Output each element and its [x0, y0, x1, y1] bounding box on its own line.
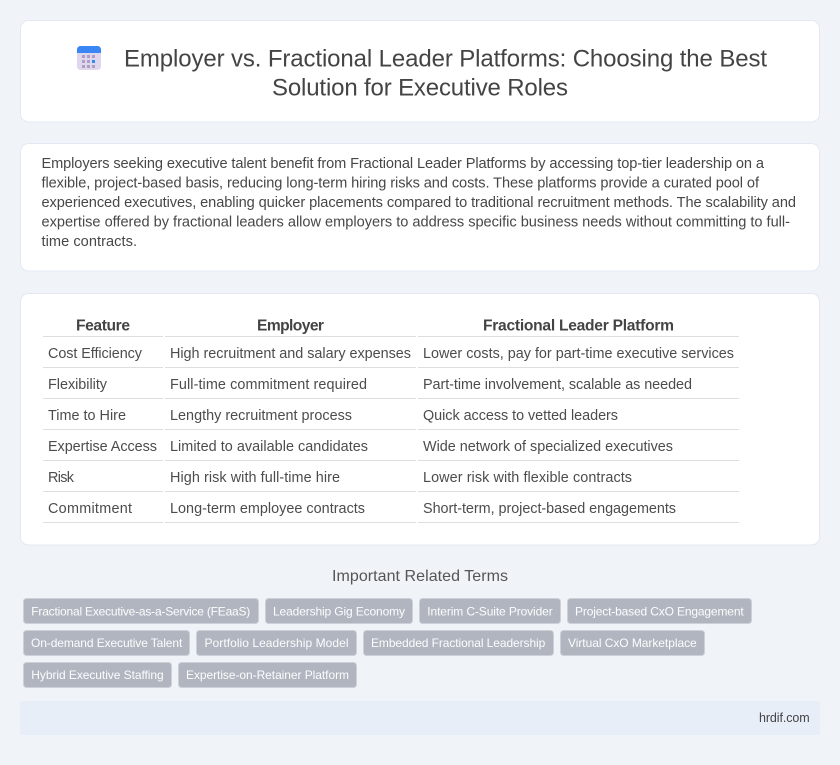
tag: Fractional Executive-as-a-Service (FEaaS) [31, 604, 250, 618]
text block: introduction paragraph: expertise offered by fractional leaders allow employers to address specific business needs without committing to full- [42, 214, 790, 230]
table header row: Fractional Leader Platform [483, 318, 674, 334]
tag [364, 630, 554, 656]
table header row [76, 318, 674, 334]
row: flexibility [48, 377, 692, 393]
tag: On-demand Executive Talent [31, 636, 183, 650]
row: expertise access: Expertise Access [48, 439, 157, 455]
tag: Portfolio Leadership Model [204, 636, 348, 650]
tag [568, 598, 752, 624]
title: Solution for Executive Roles [272, 74, 568, 102]
footer [20, 701, 820, 735]
tag: Virtual CxO Marketplace [568, 636, 697, 650]
row: expertise access: Wide network of specialized executives [423, 439, 673, 455]
tag: Interim C-Suite Provider [427, 604, 553, 618]
tag [196, 630, 356, 656]
row: flexibility: Part-time involvement, scalable as needed [423, 377, 692, 393]
tag list: related terms [24, 598, 752, 688]
text block: introduction paragraph: time contracts. [42, 234, 137, 250]
tag [24, 630, 190, 656]
table header row: Employer [257, 318, 324, 334]
row: cost efficiency [48, 346, 734, 362]
row: commitment [48, 501, 676, 517]
tag [560, 630, 704, 656]
row: risk: High risk with full-time hire [170, 470, 340, 486]
tag: Leadership Gig Economy [273, 604, 405, 618]
text block: introduction paragraph: flexible, project-based basis, reducing long-term hiring risks and costs. These platforms provide a curated pool of [42, 176, 760, 192]
row: commitment: Commitment [48, 501, 132, 517]
title: Employer vs. Fractional Leader Platforms: Choosing the Best [124, 46, 767, 72]
panel: header [20, 20, 820, 122]
text block: introduction paragraph: experienced executives, enabling quicker placements compared to traditional recruitment methods. The scalability and [42, 195, 796, 211]
table header row: Feature [76, 318, 130, 334]
panel: comparison table [20, 294, 820, 545]
row: expertise access: Limited to available candidates [170, 439, 368, 455]
heading: important related terms: Important Related Terms [332, 568, 508, 585]
row: risk: Lower risk with flexible contracts [423, 470, 632, 486]
title [124, 46, 767, 102]
icon: calendar [77, 46, 101, 70]
tag [24, 598, 258, 624]
row: time to hire: Quick access to vetted leaders [423, 408, 618, 424]
row: time to hire: Lengthy recruitment process [170, 408, 352, 424]
row: time to hire: Time to Hire [48, 408, 126, 424]
tag: Project-based CxO Engagement [575, 604, 744, 618]
tag [24, 662, 172, 688]
row: cost efficiency: Lower costs, pay for part-time executive services [423, 346, 734, 362]
row: commitment: Short-term, project-based engagements [423, 501, 676, 517]
text block: introduction paragraph: Employers seeking executive talent benefit from Fractional Leader Platforms by accessing top-tier leadership on a [42, 156, 765, 172]
row: cost efficiency: Cost Efficiency [48, 346, 143, 362]
row: flexibility: Full-time commitment required [170, 377, 367, 393]
row: commitment: Long-term employee contracts [170, 501, 365, 517]
row: cost efficiency: High recruitment and salary expenses [170, 346, 411, 362]
tag [178, 662, 356, 688]
tag: Hybrid Executive Staffing [31, 668, 164, 682]
tag [420, 598, 560, 624]
tag [266, 598, 412, 624]
panel: introduction [20, 144, 820, 271]
row: time to hire [48, 408, 618, 424]
row: flexibility: Flexibility [48, 377, 108, 393]
row: risk: Risk [48, 470, 75, 486]
row: expertise access [48, 439, 673, 455]
row: risk [48, 470, 632, 486]
text block: introduction paragraph [42, 156, 796, 250]
tag: Expertise-on-Retainer Platform [186, 668, 349, 682]
footer source text: hrdif.com [759, 711, 810, 725]
tag: Embedded Fractional Leadership [371, 636, 546, 650]
